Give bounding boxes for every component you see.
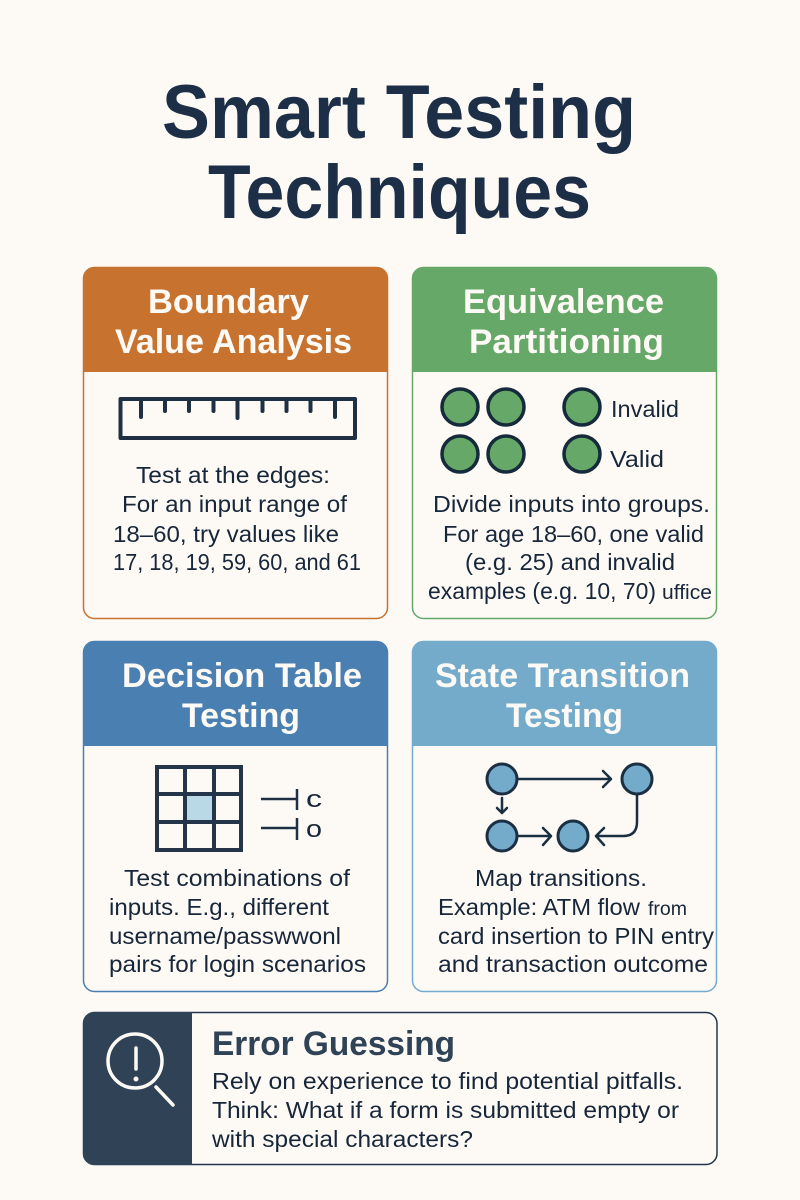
title: Smart Testing <box>162 70 636 155</box>
header: boundary value analysis <box>83 267 388 372</box>
panel: error guessing <box>83 1012 717 1165</box>
icon: ruler <box>120 399 355 438</box>
text: error guessing description: Rely on experience to find potential pitfalls. <box>212 1068 683 1094</box>
text: equivalence description: examples (e.g. 10, 70) <box>428 578 656 604</box>
icon: condition and outcome markers <box>261 786 322 843</box>
icon: condition and outcome markers: c <box>306 786 322 813</box>
heading: error guessing: Error Guessing <box>212 1025 455 1063</box>
icon block: magnifier with exclamation <box>83 1012 192 1165</box>
title <box>162 70 636 235</box>
title: Techniques <box>208 150 591 235</box>
text: equivalence description <box>428 491 712 604</box>
header: state transition testing <box>412 641 717 746</box>
text: equivalence description: uffice <box>662 582 712 604</box>
text: equivalence description: Divide inputs into groups. <box>433 491 710 517</box>
text: decision table description: inputs. E.g., different <box>109 894 329 920</box>
panel: state transition testing <box>412 641 717 992</box>
text: state transition description: Map transitions. <box>475 865 647 891</box>
panel: equivalence partitioning <box>412 267 717 618</box>
text: boundary description: Test at the edges: <box>136 462 330 488</box>
header: equivalence partitioning <box>412 267 717 372</box>
text: error guessing description: Think: What if a form is submitted empty or <box>212 1097 679 1123</box>
text: state transition description: card insertion to PIN entry <box>438 923 714 949</box>
header: decision table testing <box>83 641 388 746</box>
text: state transition description: Example: ATM flow <box>438 894 641 920</box>
panel: decision table testing <box>83 641 388 992</box>
legend: invalid and valid labels: Valid <box>610 446 664 472</box>
text: state transition description: and transaction outcome <box>438 951 708 977</box>
header: equivalence partitioning: Partitioning <box>469 323 664 361</box>
header: state transition testing: Testing <box>506 697 623 735</box>
header: decision table testing: Testing <box>182 697 300 735</box>
text: decision table description: Test combinations of <box>124 865 350 891</box>
icon: condition and outcome markers: o <box>306 816 322 843</box>
text: state transition description <box>438 865 714 977</box>
text: decision table description: pairs for login scenarios <box>109 951 366 977</box>
panel: boundary value analysis <box>83 267 388 618</box>
header: boundary value analysis: Value Analysis <box>115 323 352 361</box>
diagram: state transitions <box>487 764 652 851</box>
legend: invalid and valid labels: Invalid <box>611 396 679 422</box>
text: decision table description <box>109 865 366 977</box>
header: equivalence partitioning: Equivalence <box>463 283 664 321</box>
text: error guessing description <box>211 1068 683 1152</box>
legend: invalid and valid labels <box>610 396 679 472</box>
header: decision table testing: Decision Table <box>122 657 362 695</box>
text: equivalence description: (e.g. 25) and invalid <box>465 549 675 575</box>
text: boundary description: 17, 18, 19, 59, 60, and 61 <box>113 549 361 575</box>
header: boundary value analysis: Boundary <box>148 283 309 321</box>
text: error guessing description: with special characters? <box>211 1126 473 1152</box>
text: decision table description: username/passwwonl <box>109 923 341 949</box>
text: boundary description: For an input range of <box>122 491 347 517</box>
icon: partition circles <box>442 389 600 472</box>
icon: decision grid <box>157 767 241 850</box>
text: boundary description: 18–60, try values like <box>113 521 339 547</box>
text: equivalence description: For age 18–60, one valid <box>443 521 704 547</box>
header: state transition testing: State Transition <box>435 657 690 695</box>
text: boundary description <box>113 462 361 575</box>
text: state transition description: from <box>648 899 687 920</box>
